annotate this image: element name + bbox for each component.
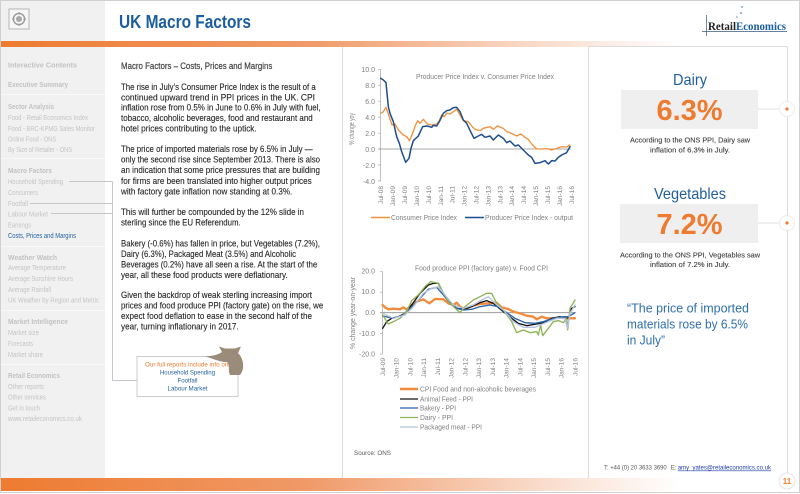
chart: Producer Price Index v Consumer Price Index: -2.0 [363,163,375,170]
text block: article body: sterling since the EU Referendum. [121,216,241,227]
chart: Food produce PPI v Food CPI: Jan-11 [421,358,428,378]
icon: owl mascot [205,346,243,375]
text block: article body: continued upward trend in PPI prices in the UK. CPI [121,91,315,102]
chart: Food produce PPI v Food CPI: Packaged meat - PPI [420,424,482,432]
chart: Food produce PPI v Food CPI: Jul-10 [408,358,414,376]
text block: article body: The price of imported materials rose by 6.5% in July — [121,143,313,154]
chart: Producer Price Index v Consumer Price Index: 10.0 [361,67,375,74]
panel: sidebar navigation: Food - Retail Economics Index [8,115,88,122]
text block: article body: Beverages (0.2%) have all seen a rise. At the start of the [121,258,317,269]
text block: article body: Given the backdrop of weak sterling increasing import [121,289,312,300]
chart: Producer Price Index v Consumer Price Index: Jul-11 [450,186,456,203]
chart: Food produce PPI v Food CPI: CPI Food and non-alcoholic beverages [420,386,536,394]
panel: sidebar navigation: Executive Summary [8,80,69,89]
panel: sidebar navigation: www.retaileconomics.co.uk [7,416,82,423]
chart: Food produce PPI v Food CPI: Jan-16 [559,358,566,378]
text block: article body: year, turning inflationary in 2017. [121,321,239,332]
panel: sidebar navigation: Get in touch [8,406,40,412]
panel: sidebar navigation: Forecasts [8,341,33,348]
panel: Vegetables stat: Vegetables [654,186,726,203]
chart: Food produce PPI v Food CPI: Jul-14 [517,358,524,376]
panel: charts column border [342,47,344,478]
chart: Producer Price Index v Consumer Price Index: Jul-16 [569,186,576,204]
panel: Dairy stat: inflation of 6.3% in July. [650,146,730,154]
chart: Producer Price Index v Consumer Price Index: Jul-15 [545,186,552,204]
chart: Producer Price Index v Consumer Price Index: 2.0 [365,131,375,138]
chart: Producer Price Index v Consumer Price Index: Producer Price Index v. Consumer Price Index [416,74,554,81]
chart: Food produce PPI v Food CPI: Jan-13 [476,358,483,378]
panel: sidebar navigation: Average Temperature [8,265,66,272]
chart: Food produce PPI v Food CPI: Jan-14 [504,358,511,378]
chart: Producer Price Index v Consumer Price Index: Producer Price Index - output [485,215,573,222]
chart: Producer Price Index v Consumer Price Index: Jan-09 [390,186,397,206]
contact details: T: +44 (0) 20 3633 3690 [604,464,667,472]
chart: Food produce PPI v Food CPI: 10.0 [361,289,375,296]
text block: article body: with factory gate inflation now standing at 0.3%. [120,185,292,196]
panel: sidebar navigation: Food - BRC-KPMG Sales Monitor [8,126,96,133]
text block: article body: tobacco, alcoholic beverages, food and restaurant and [121,112,313,123]
text block: article body: prices and food produce PPI (factory gate) on the rise, we [121,300,323,311]
chart: Food produce PPI v Food CPI: -10.0 [359,331,375,338]
header band [1,41,681,47]
chart: Producer Price Index v Consumer Price Index: Jul-08 [378,186,385,204]
panel: Dairy stat: According to the ONS PPI, Dairy saw [630,136,751,144]
text block: article body: inflation rose from 0.5% in June to 0.6% in July with fuel, [121,102,321,113]
chart: Producer Price Index v Consumer Price Index: Jan-12 [462,186,468,206]
panel: sidebar navigation: Macro Factors [8,166,52,175]
callout: full reports [137,346,243,396]
panel: sidebar navigation: Market Intelligence [8,317,68,326]
text block: article body: hotel prices contributing to the uptick. [121,122,257,133]
panel: sidebar navigation: Other services [8,394,46,402]
contact details: E: [671,464,677,472]
chart: Food produce PPI v Food CPI: Jul-11 [435,358,442,375]
title: UK Macro Factors [119,12,251,32]
logo: Retail Economics: Economics [736,21,786,33]
text block: article body: Dairy (6.3%), Packaged Meat (3.5%) and Alcoholic [121,248,296,259]
panel: sidebar navigation [7,60,99,423]
callout: full reports: Our full reports include info on: [145,362,230,368]
chart: Producer Price Index v Consumer Price Index: Jan-11 [438,186,445,206]
panel: sidebar navigation: Market share [8,352,43,359]
chart: Food produce PPI v Food CPI [350,266,579,432]
page number [779,473,795,489]
panel: right column border [588,46,788,478]
chart: Producer Price Index v Consumer Price Index: Jan-16 [557,186,564,206]
chart: Producer Price Index v Consumer Price Index: Jul-12 [474,186,480,204]
chart: Producer Price Index v Consumer Price Index: Consumer Price Index [391,215,457,222]
chart: Food produce PPI v Food CPI: Dairy - PPI [420,415,453,422]
chart: Producer Price Index v Consumer Price Index: Jul-09 [402,186,409,204]
chart: Food produce PPI v Food CPI: Jan-15 [531,358,538,378]
panel: Dairy stat: 6.3% [656,95,723,127]
chart: Food produce PPI v Food CPI: Jul-09 [380,358,387,376]
chart: Producer Price Index v Consumer Price Index: 8.0 [365,83,375,90]
chart: Food produce PPI v Food CPI: Jul-12 [462,358,469,376]
chart: Food produce PPI v Food CPI: % change year-on-year [350,276,357,349]
panel: sidebar navigation: Average Sunshine Hours [8,276,73,283]
text block: article body: expect food deflation to ease in the second half of the [121,310,312,321]
panel: sidebar navigation: Labour Market [8,212,48,218]
text block: article body: for firms are been translated into higher output prices [121,175,312,186]
chart: Producer Price Index v Consumer Price Index [349,67,576,222]
panel: sidebar navigation: Weather Watch [8,253,57,262]
chart: Producer Price Index v Consumer Price Index: Jul-14 [521,186,528,204]
panel: sidebar navigation: Household Spending [8,179,63,186]
panel: Vegetables stat [620,186,794,269]
chart: Producer Price Index v Consumer Price Index: 0.0 [365,147,375,154]
chart: Producer Price Index v Consumer Price Index: Jan-15 [533,186,540,206]
page number: 11 [783,477,792,486]
callout: full reports: Household Spending [160,370,215,376]
callout: full reports: Footfall [178,378,198,384]
panel: sidebar navigation: Online Food - ONS [8,136,56,144]
panel: sidebar navigation: By Size of Retailer - ONS [8,147,72,154]
chart: Producer Price Index v Consumer Price Index: Jan-10 [414,186,421,206]
text block: article body: Bakery (-0.6%) has fallen in price, but Vegetables (7.2%), [121,237,320,248]
text block: article body: The rise in July’s Consumer Price Index is the result of a [121,81,316,92]
panel: sidebar navigation: Other reports [8,384,44,391]
logo: Retail Economics [702,6,787,36]
chart: Food produce PPI v Food CPI: Jul-16 [572,358,579,376]
chart: Producer Price Index v Consumer Price Index: 4.0 [365,115,375,122]
text block: article body: an indication that some price pressures that are building [121,164,320,175]
quote: in July” [627,334,665,348]
panel: sidebar navigation: Costs, Prices and Margins [8,233,76,240]
chart: Producer Price Index v Consumer Price Index: Jan-13 [486,186,492,206]
contact details: amy_yates@retaileconomics.co.uk [678,464,772,472]
heading: article: Macro Factors – Costs, Prices and Margins [121,60,273,71]
panel: Dairy stat: Dairy [673,72,707,89]
chart: Food produce PPI v Food CPI: -20.0 [359,352,375,358]
chart: Food produce PPI v Food CPI: 20.0 [361,268,375,276]
panel: sidebar navigation: Interactive Contents [8,60,77,70]
panel: Vegetables stat: inflation of 7.2% in July. [650,260,730,269]
chart: Producer Price Index v Consumer Price Index: 6.0 [365,99,375,106]
chart: Food produce PPI v Food CPI: Food produce PPI (factory gate) v. Food CPI [415,266,548,272]
panel: sidebar navigation: Sector Analysis [8,102,54,111]
panel: sidebar navigation: Average Rainfall [8,287,51,294]
chart: Food produce PPI v Food CPI: Bakery - PPI [420,406,456,412]
chart: Producer Price Index v Consumer Price Index: Jan-14 [509,186,516,206]
text block: article body: year, all these food products were deflationary. [121,269,288,280]
text block: article body [120,81,323,332]
chart: Producer Price Index v Consumer Price Index: Jul-13 [498,186,504,204]
text block: article body: only the second rise since September 2013. There is also [121,154,320,165]
panel: Dairy stat [621,72,794,154]
quote: materials rose by 6.5% [627,318,748,332]
source note: Source: ONS [354,450,391,457]
chart: Food produce PPI v Food CPI: Animal Feed - PPI [420,396,473,404]
quote: “The price of imported [627,302,749,316]
panel: sidebar navigation: Footfall [8,201,28,208]
chart: Food produce PPI v Food CPI: Jan-10 [394,358,401,378]
panel: sidebar navigation: Retail Economics [8,371,60,380]
chart: Producer Price Index v Consumer Price Index: -4.0 [363,179,375,186]
chart: Producer Price Index v Consumer Price Index: Jul-10 [426,186,433,204]
panel: sidebar navigation: UK Weather by Region and Metric [8,298,99,304]
chart: Producer Price Index v Consumer Price Index: % change yoy [349,113,356,145]
panel: sidebar background [1,1,105,478]
chart: Food produce PPI v Food CPI: 0.0 [365,310,375,317]
contact details [604,464,772,472]
connector lines to callout [30,182,137,380]
chart: Food produce PPI v Food CPI: Jan-12 [449,358,456,378]
callout: full reports: Labour Market [168,386,208,392]
panel: sidebar navigation: Market size [8,330,39,337]
chart: Food produce PPI v Food CPI: Jul-15 [545,358,552,376]
panel: Vegetables stat: 7.2% [656,209,723,241]
panel: sidebar navigation: Consumers [8,190,38,197]
text block: article body: This will further be compounded by the 12% slide in [121,206,304,217]
quote [627,302,749,348]
logo: Retail Economics: Retail [708,21,736,33]
icon: settings target [9,9,29,29]
panel: sidebar navigation: Earnings [8,222,31,230]
chart: Food produce PPI v Food CPI: Jul-13 [490,358,497,376]
footer band [1,478,681,491]
panel: Vegetables stat: According to the ONS PPI, Vegetables saw [620,250,761,260]
